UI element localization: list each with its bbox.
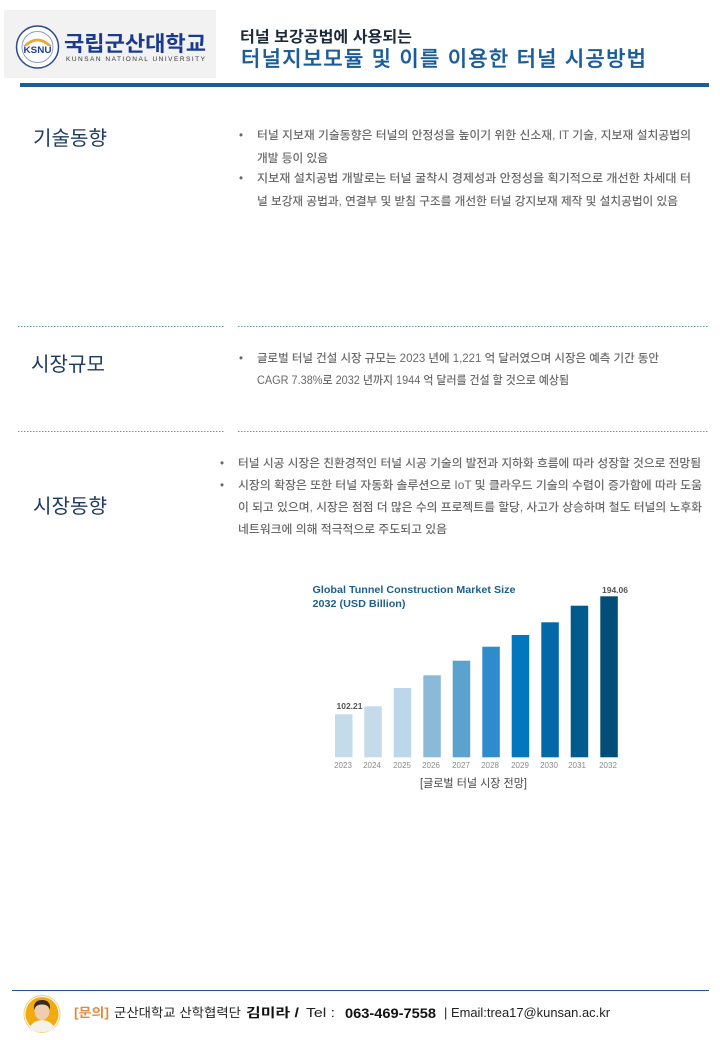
text block: technology trends: • xyxy=(239,130,243,142)
chart caption: [글로벌 터널 시장 전망] xyxy=(420,777,527,790)
logo wordmark: 국립군산대학교 xyxy=(64,33,206,56)
heading: technology trends: 기술동향 xyxy=(33,127,107,150)
year axis: 2030 xyxy=(540,761,558,770)
year axis xyxy=(334,761,617,770)
contact line xyxy=(74,1005,610,1021)
footer rule xyxy=(12,990,709,991)
year axis: 2026 xyxy=(422,761,440,770)
value labels xyxy=(336,585,628,711)
heading: market size: 시장규모 xyxy=(31,353,105,376)
value labels: 194.06 xyxy=(602,585,628,595)
chart title: Global Tunnel Construction Market Size xyxy=(312,584,516,596)
text block: technology trends: 터널 지보재 기술동향은 터널의 안정성을 높이기 위한 신소재, IT 기술, 지보재 설치공법의 xyxy=(257,129,691,142)
year axis: 2025 xyxy=(393,761,411,770)
text block: market size: CAGR 7.38%로 2032 년까지 1944 억 달러를 건설 할 것으로 예상됨 xyxy=(257,373,569,387)
title xyxy=(240,28,646,71)
bars xyxy=(335,596,618,757)
value labels: 102.21 xyxy=(336,701,363,711)
year axis: 2031 xyxy=(568,761,586,770)
title line one: 터널 보강공법에 사용되는 xyxy=(240,28,412,46)
text block: market trends: • xyxy=(220,458,224,470)
text block: market trends: 이 되고 있으며, 시장은 점점 더 많은 수의 프로젝트를 할당, 사고가 상승하며 철도 터널의 노후화 xyxy=(238,500,702,514)
contact line: 김미라 / xyxy=(246,1006,300,1020)
text block: market size: • xyxy=(239,353,243,365)
icon: university seal: KSNU xyxy=(24,45,52,56)
year axis: 2027 xyxy=(452,761,470,770)
year axis: 2029 xyxy=(511,761,529,770)
contact line: Tel : xyxy=(306,1006,335,1020)
text block: technology trends: • xyxy=(239,173,243,185)
contact line: [문의] xyxy=(74,1006,109,1020)
text block: technology trends xyxy=(239,129,691,208)
text block: market size xyxy=(239,351,659,387)
text block: market trends: 터널 시공 시장은 친환경적인 터널 시공 기술의 발전과 지하화 흐름에 따라 성장할 것으로 전망됨 xyxy=(238,456,701,470)
text block: technology trends: 개발 등이 있음 xyxy=(257,151,328,165)
icon: contact avatar xyxy=(24,996,60,1032)
logo english name: KUNSAN NATIONAL UNIVERSITY xyxy=(66,56,206,63)
year axis: 2023 xyxy=(334,761,352,770)
header rule xyxy=(20,83,709,87)
bar chart: global tunnel construction market size xyxy=(312,584,628,770)
text block: market trends: 네트워크에 의해 적극적으로 주도되고 있음 xyxy=(238,523,447,536)
year axis: 2028 xyxy=(481,761,499,770)
chart title: 2032 (USD Billion) xyxy=(312,598,406,610)
text block: market trends: 시장의 확장은 또한 터널 자동화 솔루션으로 IoT 및 클라우드 기술의 수렴이 증가함에 따라 도움 xyxy=(238,478,702,492)
chart title xyxy=(312,584,516,610)
header logo panel xyxy=(4,10,216,78)
text block: market size: 글로벌 터널 건설 시장 규모는 2023 년에 1,221 억 달러였으며 시장은 예측 기간 동안 xyxy=(257,351,659,365)
icon: university seal xyxy=(16,26,58,68)
contact line: | Email:trea17@kunsan.ac.kr xyxy=(444,1006,610,1020)
text block: technology trends: 지보재 설치공법 개발로는 터널 굴착시 경제성과 안정성을 획기적으로 개선한 차세대 터 xyxy=(257,171,691,185)
heading: market trends: 시장동향 xyxy=(33,495,107,518)
text block: market trends: • xyxy=(220,480,224,492)
year axis: 2032 xyxy=(599,761,617,770)
contact line: 063-469-7558 xyxy=(345,1005,436,1021)
text block: market trends xyxy=(220,456,702,536)
contact line: 군산대학교 산학협력단 xyxy=(114,1006,242,1020)
year axis: 2024 xyxy=(363,761,381,770)
title line two: 터널지보모듈 및 이를 이용한 터널 시공방법 xyxy=(241,48,646,71)
text block: technology trends: 널 보강재 공법과, 연결부 및 받침 구조를 개선한 터널 강지보재 제작 및 설치공법이 있음 xyxy=(257,194,678,208)
